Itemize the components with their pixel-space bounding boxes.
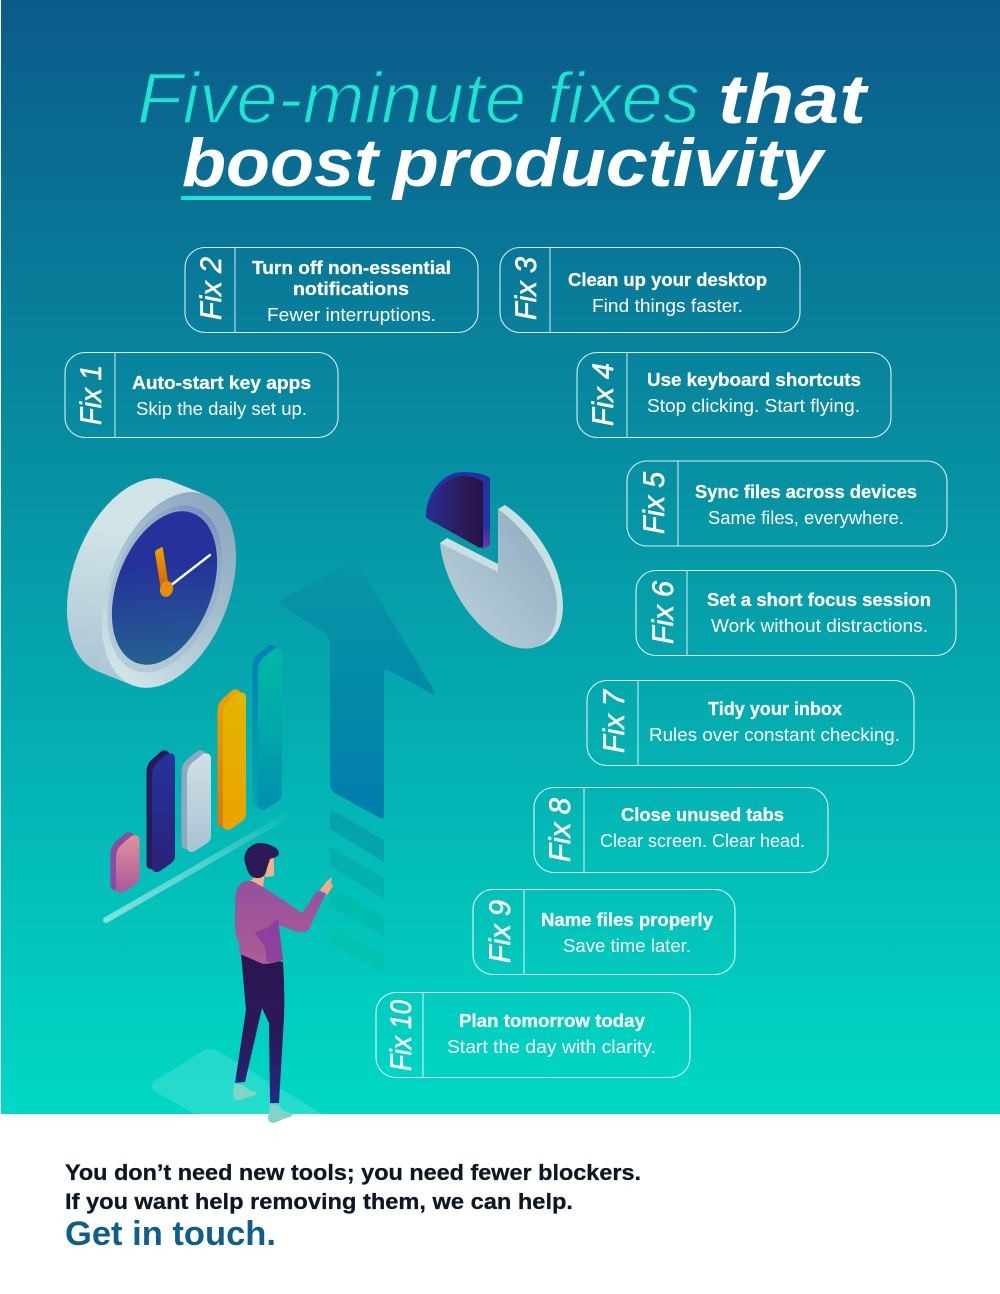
card: Fix 1: Auto-start key apps bbox=[132, 372, 311, 393]
card: Fix 1 bbox=[65, 352, 338, 438]
card: Fix 8: Close unused tabs bbox=[621, 804, 784, 825]
card: Fix 5: Fix 5 bbox=[638, 472, 671, 534]
card: Fix 7: Fix 7 bbox=[598, 689, 631, 753]
card: Fix 9 bbox=[473, 890, 735, 974]
legs bbox=[235, 954, 284, 1103]
title: Five-minute fixes bbox=[137, 59, 700, 139]
card: Fix 4 bbox=[577, 352, 891, 438]
title bbox=[137, 59, 869, 201]
card: Fix 9: Name files properly bbox=[541, 909, 714, 930]
card: Fix 5: Sync files across devices bbox=[695, 481, 917, 502]
title: that bbox=[718, 60, 869, 138]
illustration: person bbox=[233, 843, 333, 1123]
hair bbox=[244, 843, 279, 878]
pie wedge edge bbox=[426, 472, 490, 549]
card: Fix 2: Fewer interruptions. bbox=[267, 304, 436, 325]
illustration: clock bbox=[41, 459, 262, 707]
card: Fix 3 bbox=[500, 248, 800, 332]
card: Fix 4: Fix 4 bbox=[587, 363, 620, 426]
clock body bbox=[41, 459, 227, 693]
card: Fix 9: Save time later. bbox=[563, 935, 691, 956]
card: Fix 10: Start the day with clarity. bbox=[447, 1036, 656, 1057]
card: Fix 7: Rules over constant checking. bbox=[649, 724, 900, 745]
card: Fix 7: Tidy your inbox bbox=[708, 698, 843, 719]
sweater shade bbox=[255, 918, 283, 962]
card: Fix 10: Plan tomorrow today bbox=[459, 1010, 646, 1031]
neck and face bbox=[250, 858, 274, 888]
card: Fix 9: Fix 9 bbox=[484, 900, 517, 963]
card: Fix 2: notifications bbox=[293, 278, 409, 299]
card: Fix 10 bbox=[376, 992, 690, 1078]
card: Fix 2: Fix 2 bbox=[195, 257, 228, 320]
card: Fix 4: Use keyboard shortcuts bbox=[647, 369, 861, 390]
illustration: arrow base stripes bbox=[330, 809, 384, 974]
footer call to action: Get in touch. bbox=[65, 1215, 276, 1253]
title: productivity bbox=[391, 125, 827, 201]
card: Fix 1: Skip the daily set up. bbox=[136, 398, 307, 419]
hand bbox=[320, 877, 333, 895]
card: Fix 4: Stop clicking. Start flying. bbox=[647, 395, 860, 416]
hour hand bbox=[155, 547, 169, 590]
card: Fix 5 bbox=[627, 461, 947, 546]
pie wedge face bbox=[426, 476, 483, 548]
card: Fix 8: Fix 8 bbox=[544, 798, 577, 862]
card: Fix 6: Work without distractions. bbox=[711, 615, 928, 636]
card: Fix 3: Find things faster. bbox=[592, 295, 743, 316]
card: Fix 3: Fix 3 bbox=[510, 257, 543, 320]
pie rim bbox=[440, 505, 563, 648]
title: boost bbox=[182, 125, 380, 201]
clock recess bbox=[86, 489, 244, 689]
card: Fix 8 bbox=[534, 788, 828, 872]
clock dial bbox=[92, 496, 237, 680]
card: Fix 1: Fix 1 bbox=[75, 365, 108, 425]
front foot bbox=[268, 1104, 293, 1123]
minute hand bbox=[170, 555, 210, 586]
pie face bbox=[440, 509, 557, 649]
illustration: floor shadow under person bbox=[152, 1049, 322, 1114]
card: Fix 2: Turn off non-essential bbox=[252, 257, 451, 278]
clock pivot bbox=[158, 580, 175, 598]
bar: yellow bbox=[218, 689, 246, 830]
card: Fix 6: Set a short focus session bbox=[707, 589, 931, 610]
back foot bbox=[233, 1084, 257, 1100]
card: Fix 8: Clear screen. Clear head. bbox=[600, 830, 805, 851]
bar: light grey bbox=[182, 750, 211, 852]
clock rim bbox=[76, 473, 262, 707]
footer call to action bbox=[65, 1160, 641, 1253]
bar chart bbox=[110, 645, 282, 893]
card: Fix 2 bbox=[185, 248, 478, 332]
card: Fix 7 bbox=[587, 680, 914, 766]
footer call to action: If you want help removing them, we can help. bbox=[65, 1189, 573, 1214]
bar: navy bbox=[146, 750, 175, 872]
illustration: big upward arrow bbox=[280, 561, 435, 819]
sweater bbox=[235, 881, 326, 964]
card: Fix 6: Fix 6 bbox=[647, 581, 680, 644]
bar: teal bbox=[252, 645, 282, 810]
illustration: floor strip under chart bbox=[106, 817, 285, 920]
illustration: pie chart bbox=[426, 472, 563, 649]
card: Fix 5: Same files, everywhere. bbox=[708, 507, 904, 528]
card: Fix 10: Fix 10 bbox=[385, 1000, 418, 1071]
footer call to action: You don’t need new tools; you need fewer blockers. bbox=[65, 1160, 641, 1185]
bar: pink bbox=[110, 832, 140, 893]
card: Fix 6 bbox=[636, 570, 956, 656]
card: Fix 3: Clean up your desktop bbox=[568, 269, 767, 290]
